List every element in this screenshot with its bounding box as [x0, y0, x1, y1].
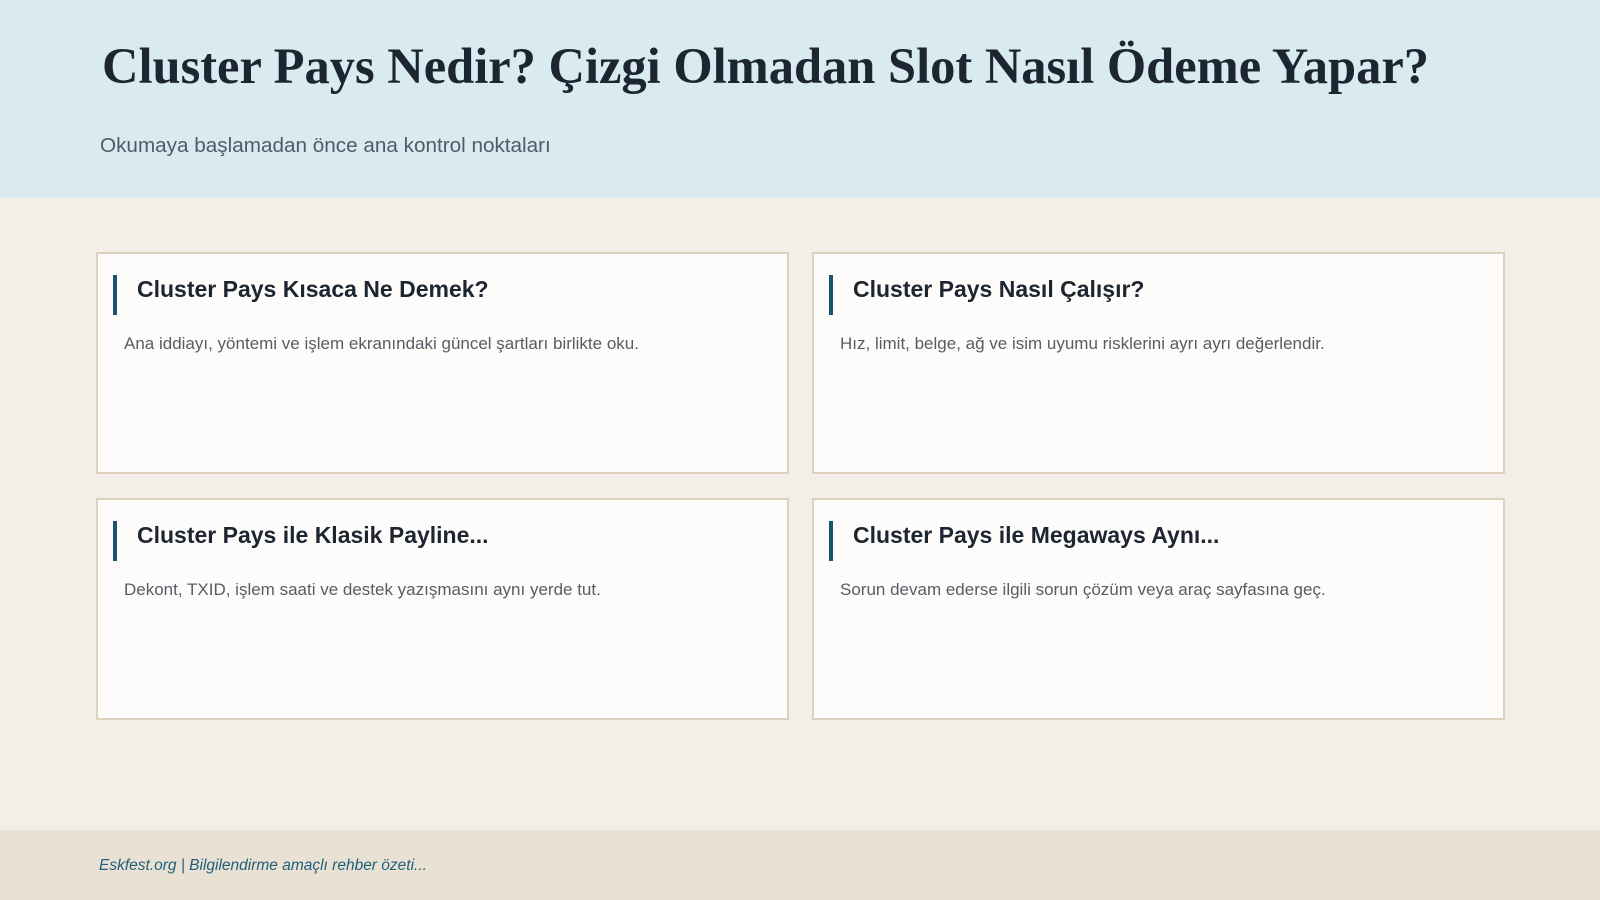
card text: Ana iddiayı, yöntemi ve işlem ekranındaki güncel şartları birlikte oku. — [124, 334, 639, 353]
card heading: Cluster Pays Kısaca Ne Demek? — [137, 276, 489, 302]
card text: Sorun devam ederse ilgili sorun çözüm veya araç sayfasına geç. — [840, 580, 1326, 599]
card text: Hız, limit, belge, ağ ve isim uyumu risklerini ayrı ayrı değerlendir. — [840, 334, 1325, 353]
footer — [0, 830, 1600, 900]
accent bar — [829, 521, 833, 561]
panel: card 1 — [96, 252, 789, 474]
card heading: Cluster Pays ile Megaways Aynı... — [853, 522, 1219, 548]
panel: card 2 — [812, 252, 1505, 474]
panel: card 3 — [96, 498, 789, 720]
header band — [0, 0, 1600, 198]
accent bar — [113, 521, 117, 561]
title: Cluster Pays Nedir? Çizgi Olmadan Slot Nasıl Ödeme Yapar? — [102, 38, 1429, 94]
card text: Dekont, TXID, işlem saati ve destek yazışmasını aynı yerde tut. — [124, 580, 601, 599]
footer text: Eskfest.org | Bilgilendirme amaçlı rehber özeti... — [99, 857, 427, 874]
panel: card 4 — [812, 498, 1505, 720]
card heading: Cluster Pays Nasıl Çalışır? — [853, 276, 1144, 302]
accent bar — [829, 275, 833, 315]
subtitle: Okumaya başlamadan önce ana kontrol noktaları — [100, 134, 551, 157]
card heading: Cluster Pays ile Klasik Payline... — [137, 522, 489, 548]
accent bar — [113, 275, 117, 315]
